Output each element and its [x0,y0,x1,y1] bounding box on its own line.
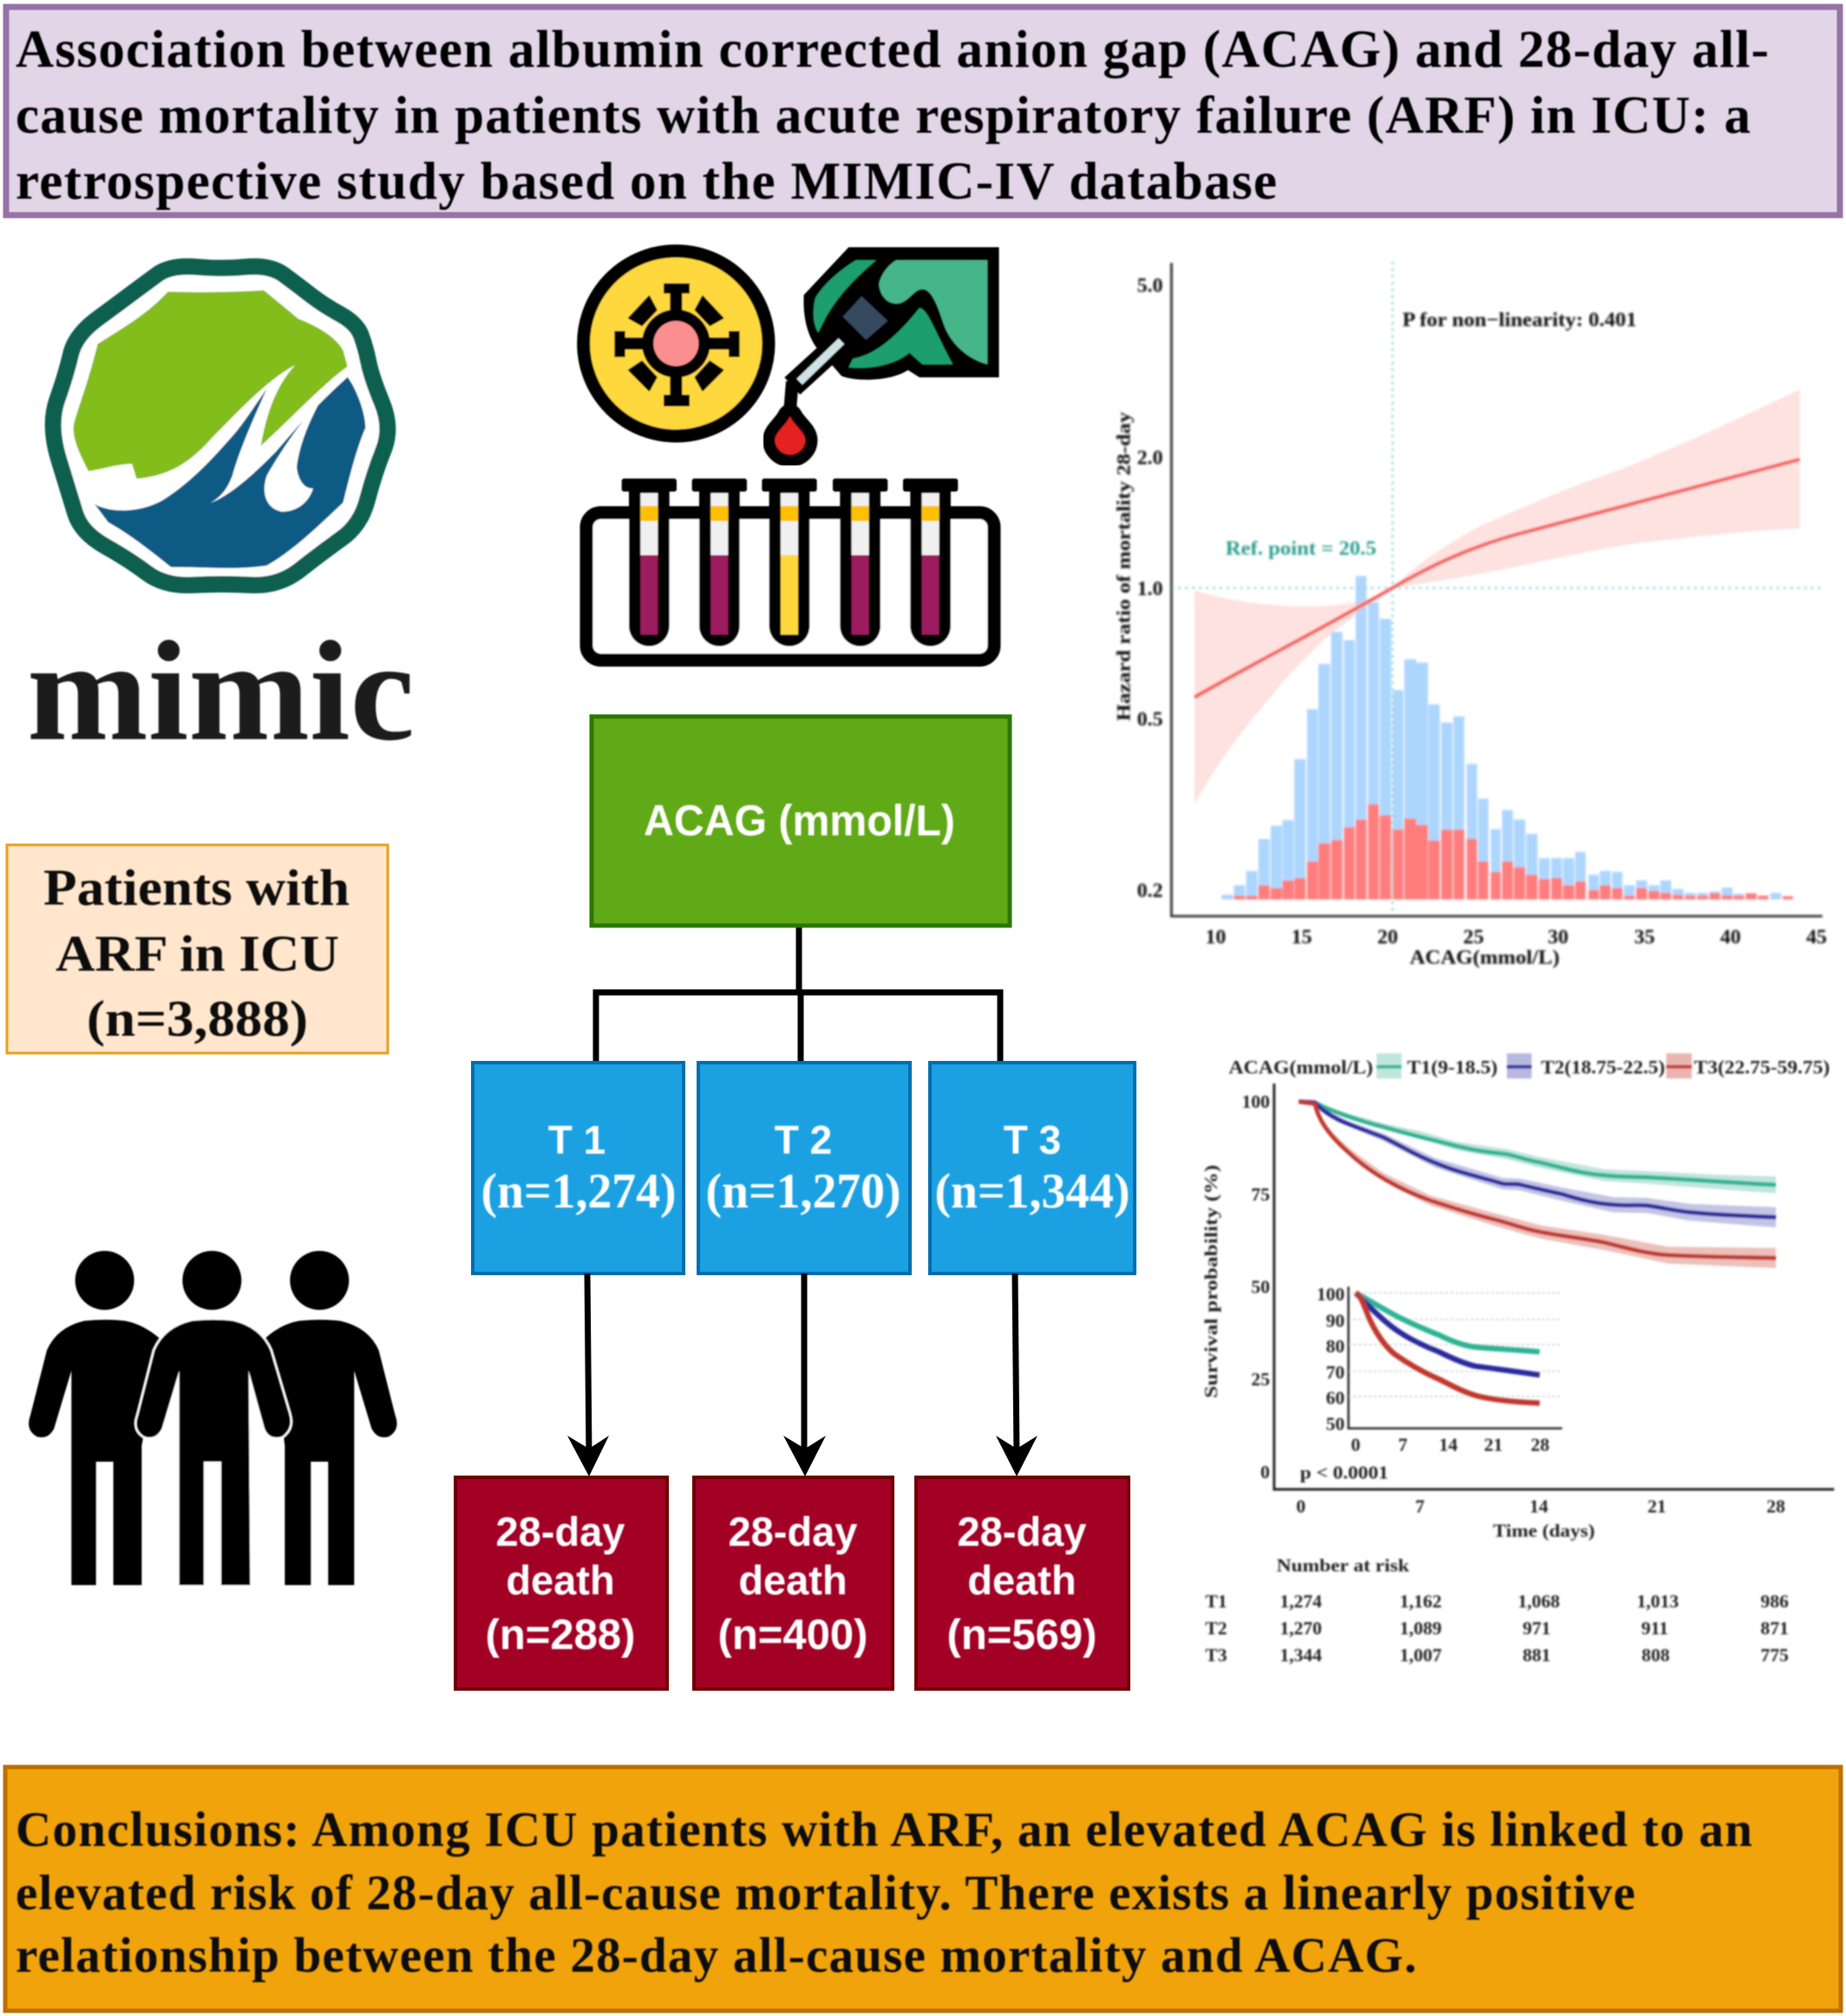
axis labels: 0.2 [1137,880,1163,902]
legend: ACAG(mmol/L) [1228,1057,1373,1077]
number at risk table: 881 [1522,1645,1551,1666]
icon: virus in petri dish [584,251,769,436]
axis labels: 21 [1647,1496,1666,1517]
arrow: T3 to death [996,1273,1038,1476]
box: T2: T 2 [775,1117,832,1162]
axis labels: 0 [1260,1462,1270,1483]
axis labels: P for non−linearity: 0.401 [1403,309,1637,331]
number at risk table: 1,162 [1399,1591,1442,1612]
flow connectors [596,926,1000,1062]
blood drop [775,416,805,455]
box: T3 deaths [916,1477,1129,1689]
axis labels: Survival probability (%) [1201,1165,1221,1398]
inset survival chart: 21 [1484,1434,1502,1455]
histogram: all patients [1221,576,1781,900]
inset survival chart: 28 [1531,1434,1549,1455]
chart: Kaplan-Meier survival [1201,1053,1834,1666]
tube 5 [903,479,958,646]
box: T1 deaths: death [506,1557,615,1603]
axis labels: 100 [1242,1091,1270,1112]
number at risk table: 986 [1761,1591,1789,1612]
legend [1228,1053,1830,1078]
conclusions: elevated risk of 28-day all-cause mortality. There exists a linearly positive [16,1866,1635,1921]
axis labels: 2.0 [1137,447,1163,469]
box: T1 deaths [455,1477,667,1689]
axis labels: 25 [1463,926,1484,948]
tube 4 [833,479,887,646]
tube 1 [622,479,677,646]
inset survival chart: 0 [1351,1434,1360,1455]
axes [1274,1083,1834,1489]
axis labels: 10 [1206,926,1226,948]
axis labels: 0.5 [1137,709,1163,731]
axis labels [1112,275,1827,969]
patients box: (n=3,888) [87,990,308,1047]
reference point label: Ref. point = 20.5 [1226,538,1377,560]
number at risk table: T3 [1205,1645,1227,1666]
inset survival chart: 7 [1398,1434,1408,1455]
patients box: ARF in ICU [56,925,339,982]
title: Association between albumin corrected anion gap (ACAG) and 28-day all- [16,21,1769,79]
title: cause mortality in patients with acute respiratory failure (ARF) in ICU: a [16,87,1751,145]
inset survival chart: 90 [1326,1310,1345,1331]
axis labels: 5.0 [1137,275,1163,297]
number at risk table: T1 [1205,1591,1227,1612]
box: T1 deaths: (n=288) [486,1612,635,1659]
number at risk table [1205,1555,1789,1666]
box: T1 deaths: 28-day [496,1509,625,1555]
number at risk table: Number at risk [1277,1555,1410,1575]
box: T3: T 3 [1004,1117,1061,1162]
title: retrospective study based on the MIMIC-IV database [16,153,1277,211]
patients box [7,845,388,1053]
inset survival chart [1317,1284,1562,1455]
inset survival chart: 70 [1326,1362,1345,1383]
number at risk table: 1,068 [1518,1591,1560,1612]
axis labels [1201,1091,1785,1541]
legend: T3(22.75-59.75) [1694,1057,1830,1077]
box: T2 [698,1063,910,1273]
axes [1171,263,1823,916]
axis labels: 50 [1251,1277,1270,1297]
number at risk table: 1,274 [1280,1591,1322,1612]
number at risk table: 1,007 [1399,1645,1442,1666]
axis labels: 15 [1292,926,1312,948]
box: T1: (n=1,274) [481,1164,677,1219]
axis labels: 75 [1251,1184,1270,1205]
arrow: T2 to death [783,1273,826,1476]
number at risk table: 1,089 [1399,1618,1442,1639]
box: T3: (n=1,344) [935,1164,1129,1219]
number at risk table: 808 [1641,1645,1670,1666]
number at risk table: 1,270 [1280,1618,1322,1639]
axis labels: 35 [1634,926,1655,948]
tube 2 [692,479,747,646]
number at risk table: 775 [1761,1645,1789,1666]
logo emblem [53,266,388,586]
box: T1: T 1 [548,1117,606,1162]
number at risk table: 911 [1641,1618,1668,1639]
inset survival chart: 60 [1326,1388,1345,1408]
conclusions: Conclusions: Among ICU patients with ARF, an elevated ACAG is linked to an [16,1803,1752,1857]
conclusions: relationship between the 28-day all-cause mortality and ACAG. [16,1928,1417,1983]
box: T2 deaths: (n=400) [718,1612,867,1659]
inset survival chart: 80 [1326,1336,1345,1357]
conclusions [5,1767,1841,2011]
hazard ratio curve [1195,460,1800,697]
axis labels: 45 [1806,926,1827,948]
chart: restricted cubic spline [1112,262,1827,969]
inset survival chart: 100 [1317,1284,1345,1305]
box: T2 deaths: 28-day [729,1509,857,1555]
box: T3 deaths: (n=569) [947,1612,1096,1659]
box: T1 [473,1063,684,1273]
axis labels: Hazard ratio of mortality 28-day [1112,412,1134,721]
legend: T2(18.75-22.5) [1541,1057,1665,1077]
inset survival chart: 14 [1439,1434,1458,1455]
box: T3 deaths: death [967,1557,1077,1603]
axis labels: p < 0.0001 [1300,1463,1388,1483]
number at risk table: 871 [1761,1618,1789,1639]
axis labels: 28 [1766,1496,1785,1517]
title [6,7,1840,215]
number at risk table: 1,013 [1637,1591,1679,1612]
axis labels: 14 [1529,1496,1548,1517]
icon: test tube rack [586,479,994,660]
box: T2 deaths: death [738,1557,848,1603]
legend: T1(9-18.5) [1407,1057,1497,1077]
box: ACAG: ACAG (mmol/L) [644,796,955,845]
icon: gloved hand with dropper [775,247,999,455]
axis labels: 1.0 [1137,578,1163,600]
logo wordmark: mimic [27,612,415,770]
axis labels: 0 [1296,1496,1306,1517]
inset survival chart: 50 [1326,1414,1345,1434]
confidence band [1195,389,1800,804]
box: T3 deaths: 28-day [958,1509,1086,1555]
axis labels: 20 [1378,926,1398,948]
icon: three people [29,1251,396,1585]
number at risk table: 971 [1522,1618,1551,1639]
histogram: deaths [1234,804,1793,900]
patients box: Patients with [43,859,350,916]
icon: MIMIC logo [27,266,415,770]
axis labels: Time (days) [1493,1521,1595,1541]
box: T2 deaths [694,1477,893,1689]
axis labels: 40 [1720,926,1741,948]
arrow: T1 to death [567,1273,609,1476]
box: T3 [930,1063,1135,1273]
survival bands [1299,1102,1776,1268]
axis labels: ACAG(mmol/L) [1410,946,1560,969]
box: T2: (n=1,270) [706,1164,900,1219]
reference lines [1171,262,1825,916]
axis labels: 25 [1251,1369,1270,1390]
axis labels: 30 [1548,926,1568,948]
number at risk table: 1,344 [1280,1645,1322,1666]
number at risk table: T2 [1205,1618,1227,1639]
box: ACAG [592,717,1010,926]
axis labels: 7 [1415,1496,1424,1517]
survival curves [1299,1102,1776,1258]
tube 3 [762,479,817,646]
